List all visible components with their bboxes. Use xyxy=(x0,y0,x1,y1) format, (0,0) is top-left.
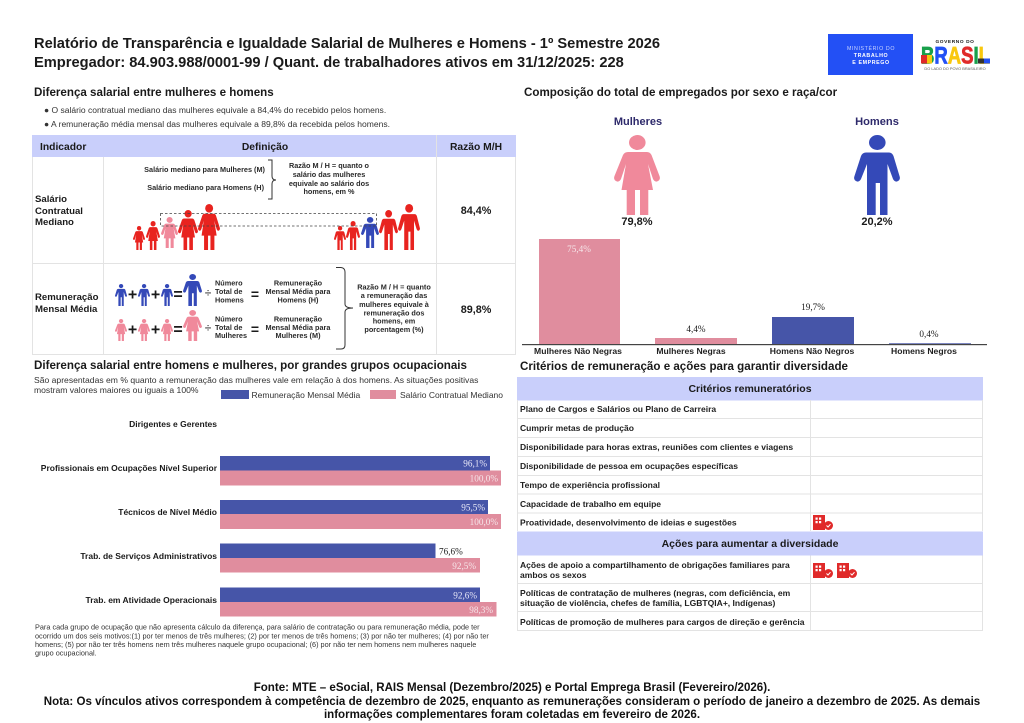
heading: critérios: Critérios de remuneração e ações para garantir diversidade xyxy=(520,360,849,373)
row label: remuneração mensal média: Remuneração xyxy=(35,292,99,303)
logo: Governo do Brasil: BRASIL xyxy=(921,42,990,70)
bar chart: grupos ocupacionais xyxy=(41,419,501,616)
logo: Ministério do Trabalho e Emprego: MINISTÉRIO DO xyxy=(847,45,895,52)
definition: razão remuneração: porcentagem (%) xyxy=(364,325,424,334)
table header: Razão M/H xyxy=(450,142,502,153)
footer notes xyxy=(44,682,980,721)
row label: salário contratual mediano: Salário xyxy=(35,194,67,205)
definition: salário mediano: Razão M / H = quanto o xyxy=(289,161,370,170)
bar chart: composição por raça: Mulheres Não Negras xyxy=(534,346,622,356)
heading: composição: Composição do total de empregados por sexo e raça/cor xyxy=(524,86,838,99)
footer notes: Nota: Os vínculos ativos correspondem à competência de dezembro de 2025, enquanto as remunerações consideram o período de janeiro a dezembro de 2025. As demais xyxy=(44,696,980,708)
bar chart: composição por raça: Homens Negros xyxy=(891,346,957,356)
footnote: grupo ocupacional. xyxy=(35,648,97,658)
formula: homens: Número xyxy=(215,278,243,288)
formula: homens: Total de xyxy=(215,287,242,296)
definition: razão remuneração: a remuneração das xyxy=(361,291,427,300)
description xyxy=(34,375,478,395)
formula: homens: Homens xyxy=(215,296,244,304)
definition: salário mediano xyxy=(144,160,370,199)
group: técnicos: 100,0% xyxy=(470,517,498,527)
formula: mulheres: Mensal Média para xyxy=(266,323,331,332)
logo: Ministério do Trabalho e Emprego xyxy=(828,34,913,75)
definition: salário mediano: salário das mulheres xyxy=(293,170,365,179)
action rows: Ações de apoio a compartilhamento de obrigações familiares para xyxy=(520,560,790,570)
action rows: Políticas de contratação de mulheres (negras, com deficiência, em xyxy=(520,588,791,598)
legend: Remuneração Mensal Média xyxy=(252,390,360,400)
table header xyxy=(40,142,502,153)
bar chart: composição por raça: 19,7% xyxy=(801,302,825,312)
formula: homens: Mensal Média para xyxy=(266,287,331,296)
group: profissionais: 100,0% xyxy=(470,474,498,484)
footnote xyxy=(35,622,489,658)
panel: criteria table xyxy=(517,377,983,630)
icon: empresa xyxy=(813,515,833,530)
group: serviços administrativos: Trab. de Serviços Administrativos xyxy=(80,551,217,561)
definition: razão remuneração: Razão M / H = quanto xyxy=(357,282,431,292)
icon group: mulheres: Mulheres xyxy=(614,116,662,128)
title xyxy=(34,36,660,71)
group: profissionais xyxy=(41,456,501,486)
formula: mulheres: Remuneração xyxy=(274,314,323,324)
footnote: ocorrido um dos seis motivos:(1) por ter menos de três mulheres; (2) por ter menos de três homens; (3) por não ter mulheres; (4) por não ter xyxy=(35,632,489,640)
group: atividade operacionais xyxy=(86,588,496,616)
value: 84,4%: 84,4% xyxy=(461,205,492,217)
logo: Governo do Brasil: DO LADO DO POVO BRASILEIRO xyxy=(924,66,986,71)
title: Empregador: 84.903.988/0001-99 / Quant. de trabalhadores ativos em 31/12/2025: 228 xyxy=(34,55,624,71)
formula: mulheres: = xyxy=(173,322,183,338)
criteria rows xyxy=(520,404,793,528)
bullets xyxy=(44,105,390,129)
title: Relatório de Transparência e Igualdade Salarial de Mulheres e Homens - 1º Semestre 2026 xyxy=(34,36,660,52)
formula: homens xyxy=(115,274,331,306)
group: serviços administrativos xyxy=(80,544,480,572)
definition: salário mediano: homens, em % xyxy=(303,187,355,196)
action rows: Políticas de promoção de mulheres para cargos de direção e gerência xyxy=(520,617,805,627)
icon group: mulheres: 79,8% xyxy=(621,216,653,228)
footnote: Para cada grupo de ocupação que não apresenta cálculo da diferença, para salário de contratação ou para remuneração média, pode ter xyxy=(35,622,480,632)
formula: mulheres: Mulheres xyxy=(215,331,247,340)
bar chart: composição por raça xyxy=(522,239,987,356)
group: profissionais: Profissionais em Ocupações Nível Superior xyxy=(41,463,218,473)
formula: homens: Homens (H) xyxy=(278,296,319,304)
description: São apresentadas em % quanto a remuneração das mulheres vale em relação à dos homens. As situações positivas xyxy=(34,375,478,385)
definition: salário mediano: equivale ao salário dos xyxy=(289,179,369,188)
group: técnicos: Técnicos de Nível Médio xyxy=(118,507,217,517)
row label: salário contratual mediano: Mediano xyxy=(35,217,74,228)
formula: mulheres: + xyxy=(151,322,160,338)
formula: homens: ÷ xyxy=(205,286,212,300)
bar chart: composição por raça: 0,4% xyxy=(919,329,939,339)
logo: Ministério do Trabalho e Emprego: TRABALHO xyxy=(854,53,888,59)
icon: row of men xyxy=(334,204,420,250)
bar chart: composição por raça: Mulheres Negras xyxy=(656,346,726,356)
logo: Governo do Brasil: GOVERNO DO xyxy=(935,39,975,45)
bullets: ● A remuneração média mensal das mulheres equivale a 89,8% da recebida pelos homens. xyxy=(44,119,390,129)
definition: salário mediano: Salário mediano para Mulheres (M) xyxy=(144,165,266,174)
formula: homens: = xyxy=(251,286,259,302)
table header: Indicador xyxy=(40,142,86,153)
formula: mulheres: + xyxy=(128,322,137,338)
formula: mulheres: ÷ xyxy=(205,321,212,335)
icon group: homens xyxy=(854,116,900,228)
bar chart: composição por raça: 4,4% xyxy=(686,324,706,334)
group: técnicos xyxy=(118,500,501,529)
action rows xyxy=(520,560,805,627)
group: atividade operacionais: 98,3% xyxy=(469,605,493,615)
bullets: ● O salário contratual mediano das mulheres equivale a 84,4% do recebido pelos homens. xyxy=(44,105,386,115)
definition: salário mediano: Salário mediano para Homens (H) xyxy=(147,183,265,192)
formula: homens: + xyxy=(151,286,160,304)
row label: salário contratual mediano: Contratual xyxy=(35,206,83,217)
formula: homens: = xyxy=(173,286,183,304)
panel: indicator table xyxy=(32,135,516,354)
heading: grupos ocupacionais: Diferença salarial entre homens e mulheres, por grandes grupos ocupacionais xyxy=(34,359,467,372)
criteria rows: Disponibilidade para horas extras, reuniões com clientes e viagens xyxy=(520,442,793,452)
formula: mulheres: Número xyxy=(215,314,243,324)
group: profissionais: 96,1% xyxy=(463,458,487,468)
icon: row of women xyxy=(133,204,220,250)
definition: razão remuneração: homens, em xyxy=(373,316,416,326)
criteria rows: Proatividade, desenvolvimento de ideias e sugestões xyxy=(520,518,737,528)
row label: remuneração mensal média: Mensal Média xyxy=(35,304,98,315)
definition: razão remuneração: remuneração dos xyxy=(364,308,424,318)
group: técnicos: 95,5% xyxy=(461,502,485,512)
criteria rows: Cumprir metas de produção xyxy=(520,423,634,433)
bar chart: grupos ocupacionais: Dirigentes e Gerentes xyxy=(129,419,217,429)
definition: razão remuneração: mulheres equivale à xyxy=(359,300,430,309)
action rows: situação de violência, chefes de família, LGBTQIA+, Indígenas) xyxy=(520,598,775,608)
logo: Ministério do Trabalho e Emprego: E EMPREGO xyxy=(852,60,890,66)
group: atividade operacionais: 92,6% xyxy=(453,590,477,600)
heading: diferença salarial: Diferença salarial entre mulheres e homens xyxy=(34,86,274,99)
criteria rows: Plano de Cargos e Salários ou Plano de Carreira xyxy=(520,404,716,414)
footer notes: informações complementares foram coletadas em fevereiro de 2026. xyxy=(324,709,700,721)
icon group: homens: 20,2% xyxy=(861,216,893,228)
action rows: ambos os sexos xyxy=(520,570,587,580)
formula: mulheres: Mulheres (M) xyxy=(276,331,321,340)
definition: razão remuneração xyxy=(336,268,431,349)
formula: homens: Remuneração xyxy=(274,278,323,288)
legend xyxy=(221,390,503,400)
bar chart: composição por raça: 75,4% xyxy=(567,244,591,254)
criteria rows: Tempo de experiência profissional xyxy=(520,480,660,490)
group: atividade operacionais: Trab. em Atividade Operacionais xyxy=(86,595,217,605)
group: serviços administrativos: 76,6% xyxy=(439,546,463,556)
table header: Definição xyxy=(242,142,288,153)
criteria rows: Disponibilidade de pessoa em ocupações específicas xyxy=(520,461,738,471)
group: serviços administrativos: 92,5% xyxy=(452,561,476,571)
bar chart: composição por raça: Homens Não Negros xyxy=(770,346,854,356)
description: mostram valores maiores ou iguais a 100% xyxy=(34,385,199,395)
criteria rows: Capacidade de trabalho em equipe xyxy=(520,499,661,509)
footnote: homens; (5) por não ter três homens nem três mulheres naquele grupo ocupacional; (6) por não ter nem homens nem mulheres naquele xyxy=(35,640,476,649)
row label: salário contratual mediano xyxy=(35,194,83,228)
section header: critérios remuneratórios: Critérios remuneratórios xyxy=(688,383,812,395)
formula: mulheres: Total de xyxy=(215,323,242,332)
icon group: homens: Homens xyxy=(855,116,899,128)
formula: mulheres: = xyxy=(251,321,259,337)
legend: Salário Contratual Mediano xyxy=(400,390,503,400)
formula: homens: + xyxy=(128,286,137,304)
section header: ações para diversidade: Ações para aumentar a diversidade xyxy=(662,538,839,550)
formula: mulheres xyxy=(115,310,331,341)
icon group: mulheres xyxy=(614,116,662,228)
value: 89,8%: 89,8% xyxy=(461,304,492,316)
footer notes: Fonte: MTE – eSocial, RAIS Mensal (Dezembro/2025) e Portal Emprega Brasil (Fevereiro/2026). xyxy=(254,682,770,694)
icon: empresas xyxy=(813,563,857,578)
row label: remuneração mensal média xyxy=(35,292,99,315)
